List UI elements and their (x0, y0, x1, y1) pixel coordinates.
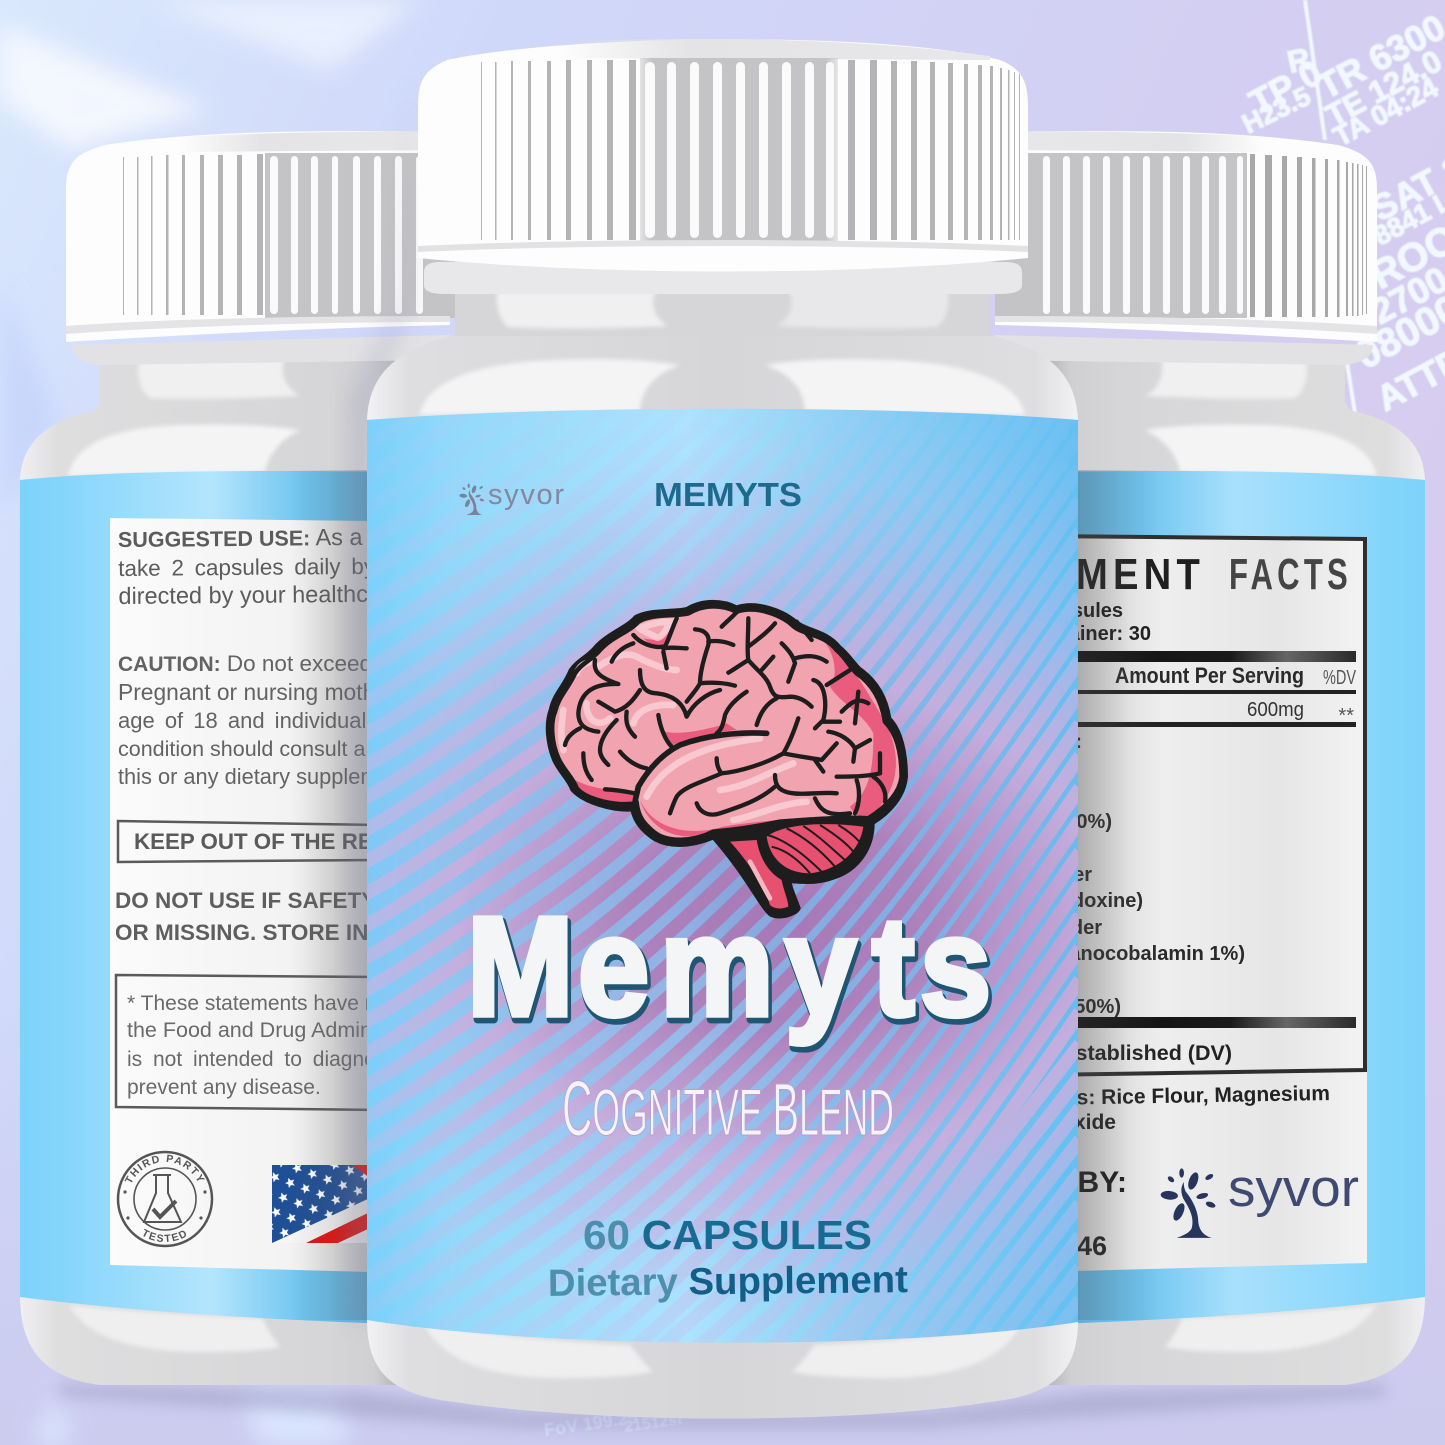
background monitor text: FoV 199.25 (543, 1407, 639, 1440)
right shoulder highlight (1145, 425, 1377, 476)
left bottle (20, 131, 690, 1418)
right bottom highlight (1165, 1305, 1376, 1352)
cerebellum (767, 824, 863, 873)
FDA disclaimer box (116, 975, 398, 1110)
brain outline (547, 601, 907, 917)
right bottle body (795, 360, 1425, 1385)
ingredient list (1020, 731, 1245, 1018)
right bottle collar (995, 335, 1373, 365)
right neck highlight (1145, 353, 1307, 399)
brain shading (575, 623, 896, 836)
brain stem (730, 840, 788, 908)
centre bottle cap (418, 39, 1028, 272)
centre bottle label (367, 408, 1078, 1343)
supplement facts title: FACTS (1229, 550, 1352, 599)
serving details: Servings Per Container: 30 (895, 623, 1151, 645)
ingredient list: Powder (1030, 917, 1102, 939)
ingredient list: (Pyridoxine) (1027, 890, 1143, 912)
supplement facts box (1040, 536, 1365, 1075)
thin divider (1040, 690, 1356, 694)
FDA disclaimer box: prevent any disease. (127, 1076, 321, 1099)
amount per serving header: Amount Per Serving (1115, 663, 1304, 688)
suggested use text: directed by your healthcare (118, 581, 402, 609)
address digits: 46 (1077, 1231, 1107, 1261)
left label centre shadow (290, 470, 370, 1320)
product name: Memyts (467, 887, 991, 1045)
safety seal warning (115, 888, 461, 945)
brain sulci (565, 608, 885, 815)
keep out of reach box: KEEP OUT OF THE REACH (134, 829, 421, 854)
serving details (886, 600, 1151, 645)
caution text: this or any dietary supplement (118, 764, 409, 789)
caution text (118, 651, 431, 789)
ingredient list: Powder (1020, 864, 1092, 886)
brain highlights (561, 622, 807, 820)
background monitor text: R (1284, 41, 1313, 80)
centre bottle neck (424, 262, 1022, 345)
thin divider (1040, 722, 1356, 727)
left shoulder highlight (68, 425, 300, 476)
background monitor text: TA 04:24 (1328, 71, 1443, 152)
daily value note: Not established (DV) (1022, 1041, 1232, 1065)
cerebrum (552, 606, 902, 840)
other ingredients: Dioxide (1040, 1111, 1116, 1134)
cerebrum outline inset (552, 606, 902, 840)
ingredient list: (Cyanocobalamin 1%) (1037, 943, 1245, 965)
dietary supplement: Dietary Supplement (548, 1259, 908, 1305)
centre shoulder highlights (420, 359, 1025, 415)
blend amount row: ** (1338, 705, 1354, 727)
syvor logo large: syvor (1228, 1159, 1359, 1218)
icon: brain (547, 601, 907, 917)
background monitor text: TP 0 (1243, 51, 1328, 123)
background monitor text: H23.5 (1237, 81, 1315, 139)
capsule count: 60 CAPSULES (583, 1212, 872, 1258)
background monitor text: TE 124.0 (1320, 43, 1445, 133)
other ingredients: Other Ingredients: Rice Flour, Magnesium (913, 1082, 1330, 1112)
syvor logo large (1160, 1159, 1359, 1238)
caution text: age of 18 and individuals with (118, 708, 427, 733)
third party tested badge (116, 1150, 214, 1248)
amount per serving header: %DV (1323, 667, 1356, 689)
right label white panel (1040, 535, 1367, 1272)
bottle ground shadow (60, 1384, 1385, 1428)
american flag (272, 1165, 370, 1243)
left bottom highlight (69, 1305, 280, 1352)
ingredient list: (50%) (1068, 996, 1121, 1018)
background monitor text (543, 0, 1445, 1440)
ingredient list: (20%) (1059, 811, 1112, 833)
centre bottle cast shadow (352, 70, 408, 1320)
serving details: Serving Size: 2 Capsules (886, 600, 1123, 622)
centre bottle body (367, 336, 1078, 1418)
safety seal warning: DO NOT USE IF SAFETY SEAL (115, 888, 442, 913)
small syvor logo: syvor (488, 479, 564, 511)
centre bottle (300, 20, 1080, 1440)
right bottle label (1025, 471, 1425, 1325)
left label white panel (110, 518, 370, 1272)
ingredient list: Blend: (1020, 731, 1082, 753)
other ingredients (913, 1082, 1330, 1134)
FDA disclaimer box: is not intended to diagnose (127, 1048, 398, 1071)
brand name small: MEMYTS (654, 476, 802, 513)
small syvor logo (459, 479, 564, 515)
third party tested badge: TESTED (143, 1228, 186, 1242)
caution text: Pregnant or nursing mothers (118, 679, 407, 705)
left bottle body (20, 360, 650, 1385)
subtitle: COGNITIVE BLEND (562, 1064, 894, 1152)
suggested use text: SUGGESTED USE: As a dietary (118, 523, 440, 552)
left bottle cap (66, 131, 455, 342)
caution text: condition should consult a doctor (118, 737, 431, 761)
blend amount row (1247, 699, 1354, 727)
thick divider (1040, 1017, 1356, 1028)
left bottle collar (72, 335, 450, 365)
FDA disclaimer box: * These statements have not (127, 992, 394, 1015)
left bottle label (20, 471, 420, 1325)
thick divider (1040, 651, 1356, 662)
right label centre shadow (1078, 470, 1160, 1320)
blend amount row: 600mg (1247, 699, 1304, 721)
keep out of reach box (118, 821, 421, 862)
centre bottom highlights (423, 1322, 1022, 1378)
right bottle cap (995, 131, 1377, 342)
left neck highlight (138, 353, 300, 399)
product name: Memyts (469, 891, 993, 1049)
third party tested badge: THIRD PARTY (124, 1154, 205, 1182)
suggested use text (118, 523, 449, 609)
background monitor text: 21512sl (623, 1411, 683, 1436)
manufactured by: BY: (1078, 1166, 1127, 1199)
FDA disclaimer box: the Food and Drug Admin (127, 1018, 372, 1042)
suggested use text: take 2 capsules daily by mouth (118, 553, 448, 581)
safety seal warning: OR MISSING. STORE IN A COOL (115, 920, 461, 945)
caution text: CAUTION: Do not exceed dose (118, 651, 427, 676)
supplement facts title: SUPPLEMENT (892, 550, 1205, 599)
right bottle (795, 131, 1425, 1385)
